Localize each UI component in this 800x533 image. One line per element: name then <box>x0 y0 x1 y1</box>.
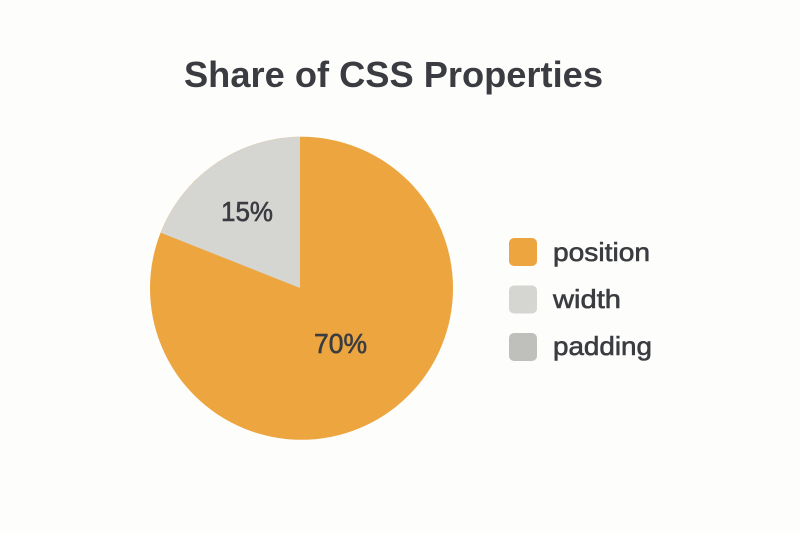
legend item: padding <box>509 331 652 361</box>
legend <box>509 237 652 361</box>
legend item: padding: padding <box>553 331 652 361</box>
pie chart <box>150 137 453 440</box>
slice: position 70% <box>150 137 453 440</box>
legend item: position <box>509 237 650 267</box>
title: Share of CSS Properties <box>184 54 603 95</box>
legend item: position: position <box>553 237 650 267</box>
label: 70%: 70% <box>314 328 367 359</box>
label: 15%: 15% <box>221 196 273 227</box>
legend item: width: width <box>552 284 621 314</box>
slice: width 15% <box>161 137 300 288</box>
legend item: width <box>509 284 621 314</box>
